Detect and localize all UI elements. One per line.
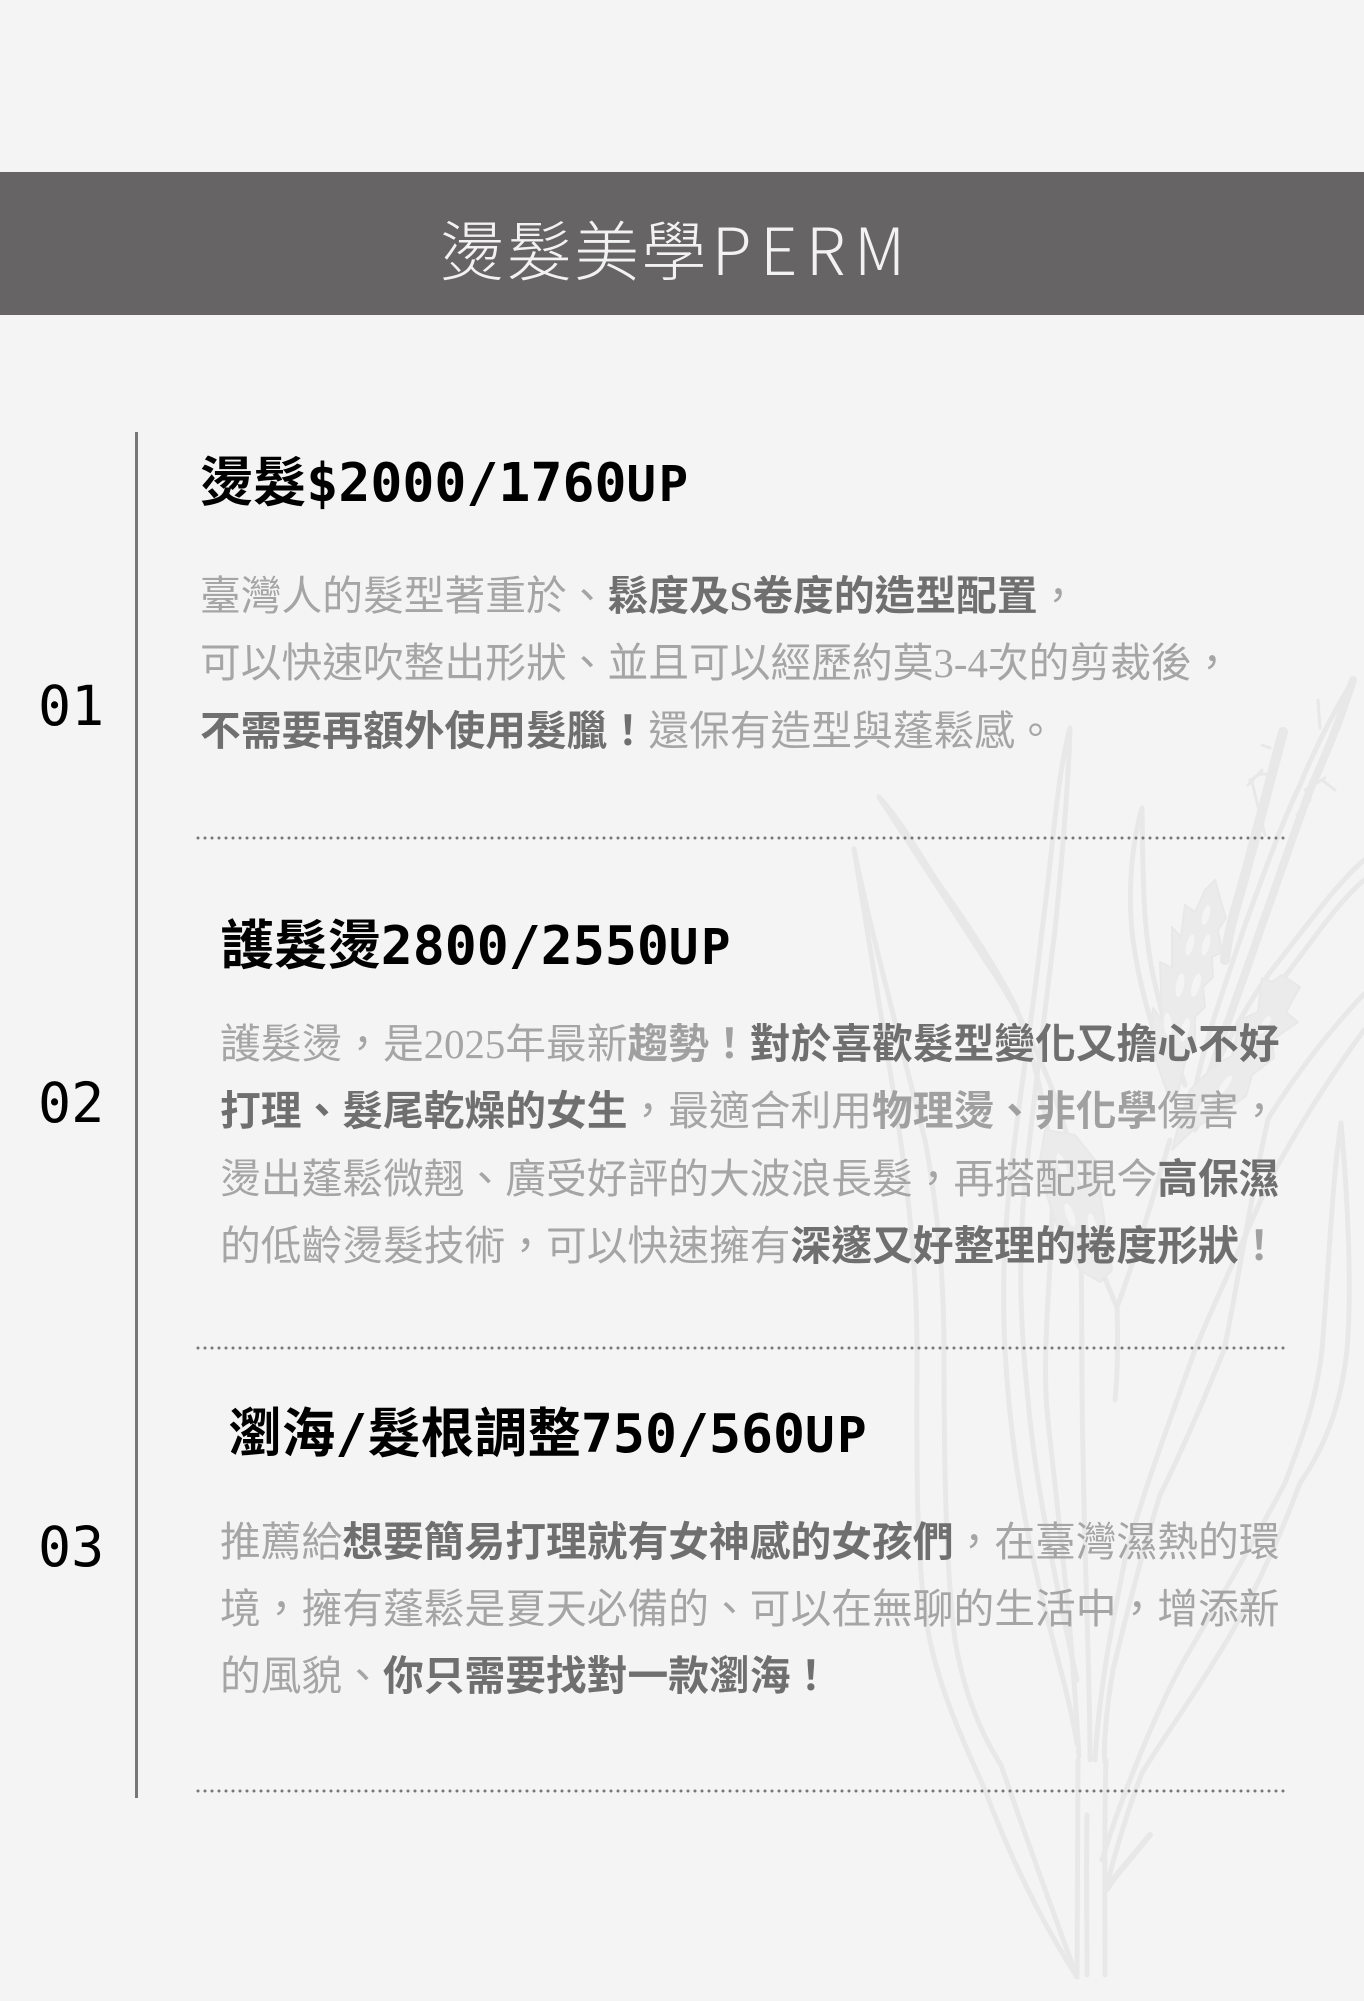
text: bangs description: 的風貌、你只需要找對一款瀏海！	[220, 1654, 831, 1699]
title: 燙髮美學PERM	[440, 200, 914, 294]
text: care perm description: 打理、髮尾乾燥的女生，最適合利用物理燙、非化學傷害，	[220, 1089, 1280, 1134]
text: perm description: 可以快速吹整出形狀、並且可以經歷約莫3-4次的剪裁後，	[200, 641, 1232, 686]
banner	[0, 172, 1364, 315]
text: care perm description: 護髮燙，是2025年最新趨勢！對於喜歡髮型變化又擔心不好	[220, 1022, 1280, 1067]
text: bangs description	[220, 1520, 1280, 1699]
text: perm description: 臺灣人的髮型著重於、鬆度及S卷度的造型配置，	[200, 574, 1078, 619]
ear 2	[1172, 975, 1300, 1150]
divider 2	[196, 1346, 1284, 1350]
panel: bangs and roots	[220, 1390, 1280, 1699]
timeline vertical line	[135, 432, 138, 1798]
divider 3	[196, 1790, 1284, 1792]
text: perm description: 不需要再額外使用髮臘！還保有造型與蓬鬆感。	[200, 709, 1056, 754]
text: care perm description	[220, 1022, 1280, 1269]
panel: perm	[200, 440, 1232, 754]
ear 3	[1040, 1130, 1112, 1282]
text: bangs description: 境，擁有蓬鬆是夏天必備的、可以在無聊的生活中，增添新	[220, 1587, 1280, 1632]
ear 1	[1150, 880, 1226, 1100]
text: bangs description: 推薦給想要簡易打理就有女神感的女孩們，在臺灣濕熱的環	[220, 1520, 1280, 1564]
panel: care perm	[220, 903, 1280, 1269]
illustration: wheat watermark	[852, 676, 1364, 1980]
text: perm description	[200, 574, 1232, 754]
number 02: 02	[38, 1070, 104, 1134]
text: care perm description: 燙出蓬鬆微翹、廣受好評的大波浪長髮，再搭配現今高保濕	[220, 1157, 1280, 1202]
number 01: 01	[38, 674, 104, 738]
heading: perm price: 燙髮$2000/1760UP	[200, 440, 691, 516]
number 03: 03	[38, 1515, 104, 1579]
heading: bangs price: 瀏海/髮根調整750/560UP	[228, 1390, 869, 1468]
text: care perm description: 的低齡燙髮技術，可以快速擁有深邃又好整理的捲度形狀！	[220, 1224, 1280, 1269]
divider 1	[196, 836, 1284, 840]
heading: care perm price: 護髮燙2800/2550UP	[220, 903, 733, 980]
